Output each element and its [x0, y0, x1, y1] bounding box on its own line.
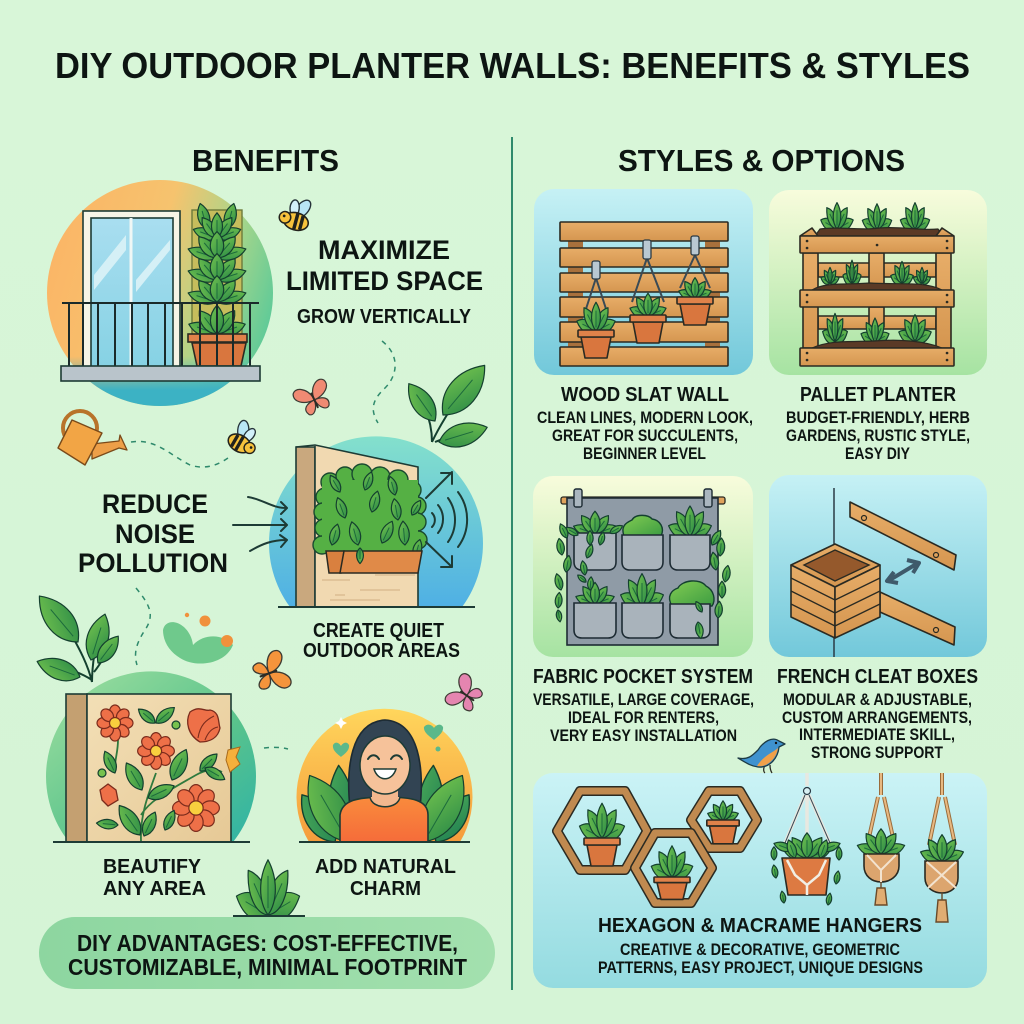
- panel: reduce noise pollution: [78, 436, 483, 662]
- icon: green plant tuft: [233, 860, 305, 926]
- icon: bee: [225, 416, 266, 459]
- callout: diy advantages: DIY ADVANTAGES: COST-EFFECTIVE,: [77, 930, 458, 956]
- caption: beautify any area: [103, 856, 206, 900]
- illustration: felt pockets with plants: [533, 476, 753, 657]
- caption: create quiet outdoor areas: [303, 620, 460, 662]
- title: DIY OUTDOOR PLANTER WALLS: BENEFITS & STYLES: [55, 45, 970, 86]
- panel: beautify any area: [46, 671, 256, 900]
- bushy plants and fans: [572, 506, 714, 613]
- icon: purple butterfly: [443, 672, 487, 717]
- icon: salmon butterfly: [291, 377, 336, 418]
- heading: reduce noise pollution: REDUCE: [102, 489, 208, 519]
- description: wood slat wall: [537, 408, 753, 463]
- panel: hexagon and macrame hangers: [533, 773, 987, 988]
- icon: smiling person among leaves: [292, 709, 479, 850]
- heading: fabric pocket system: FABRIC POCKET SYSTEM: [533, 666, 753, 688]
- panel: pallet planter: [769, 190, 987, 463]
- icon: leaf sprig: [401, 356, 496, 453]
- description: fabric pocket system: VERY EASY INSTALLATION: [550, 726, 737, 745]
- callout: diy advantages: [39, 917, 495, 989]
- caption: beautify any area: BEAUTIFY: [103, 856, 202, 878]
- heading: reduce noise pollution: POLLUTION: [78, 548, 228, 578]
- description: french cleat boxes: STRONG SUPPORT: [811, 743, 944, 762]
- panel: french cleat boxes: [769, 475, 987, 762]
- description: pallet planter: BUDGET-FRIENDLY, HERB: [786, 408, 970, 427]
- caption: add natural charm: [315, 856, 456, 900]
- panel: fabric pocket system: [533, 476, 754, 745]
- description: hexagon and macrame hangers: PATTERNS, EASY PROJECT, UNIQUE DESIGNS: [598, 958, 923, 977]
- caption: add natural charm: CHARM: [350, 878, 421, 900]
- description: french cleat boxes: CUSTOM ARRANGEMENTS,: [782, 708, 972, 727]
- icon: balcony with vertical planter: [47, 180, 273, 406]
- description: fabric pocket system: [533, 690, 754, 745]
- heading: reduce noise pollution: NOISE: [115, 519, 195, 549]
- description: french cleat boxes: MODULAR & ADJUSTABLE,: [783, 690, 972, 709]
- description: fabric pocket system: VERSATILE, LARGE COVERAGE,: [533, 690, 754, 709]
- description: pallet planter: GARDENS, RUSTIC STYLE,: [786, 426, 970, 445]
- illustration: macrame hangers: [771, 773, 965, 922]
- heading: reduce noise pollution: [78, 489, 228, 578]
- panel: wood slat wall: [534, 189, 753, 463]
- caption: beautify any area: ANY AREA: [103, 878, 206, 900]
- heading: maximize limited space: MAXIMIZE: [318, 235, 450, 265]
- icon: leaf sprig: [29, 588, 124, 686]
- heading: french cleat boxes: FRENCH CLEAT BOXES: [777, 666, 978, 688]
- caption: create quiet outdoor areas: OUTDOOR AREAS: [303, 640, 460, 662]
- description: pallet planter: [786, 408, 970, 463]
- description: hexagon and macrame hangers: CREATIVE & DECORATIVE, GEOMETRIC: [620, 940, 900, 959]
- caption: grow vertically: GROW VERTICALLY: [297, 306, 472, 328]
- heading: maximize limited space: [286, 235, 483, 296]
- trailing vines: [553, 522, 732, 639]
- illustration: pallet with herbs: [769, 190, 987, 375]
- icon: watering can: [58, 411, 127, 465]
- caption: create quiet outdoor areas: CREATE QUIET: [313, 620, 444, 642]
- illustration: wood slats with hanging pots: [534, 189, 753, 375]
- callout: diy advantages: CUSTOMIZABLE, MINIMAL FOOTPRINT: [68, 954, 467, 980]
- description: pallet planter: EASY DIY: [845, 444, 911, 463]
- icon: green wall blocking sound: [233, 436, 483, 607]
- description: fabric pocket system: IDEAL FOR RENTERS,: [568, 708, 719, 727]
- description: french cleat boxes: INTERMEDIATE SKILL,: [799, 725, 955, 744]
- description: wood slat wall: CLEAN LINES, MODERN LOOK,: [537, 408, 753, 427]
- decorative green blob with dots: [163, 613, 233, 664]
- illustration: hexagon shelves: [557, 791, 757, 903]
- description: wood slat wall: BEGINNER LEVEL: [583, 444, 706, 463]
- heading: styles and options: STYLES & OPTIONS: [618, 143, 905, 178]
- illustration: cleats and wooden box: [769, 475, 987, 657]
- icon: bluebird: [738, 739, 785, 773]
- icon: bee: [277, 192, 315, 233]
- heading: benefits: BENEFITS: [192, 143, 339, 178]
- icon: orange butterfly: [250, 649, 293, 696]
- panel: add natural charm: [292, 709, 479, 900]
- description: hexagon and macrame hangers: [598, 940, 923, 977]
- heading: wood slat wall: WOOD SLAT WALL: [561, 384, 729, 406]
- description: wood slat wall: GREAT FOR SUCCULENTS,: [552, 426, 738, 445]
- description: french cleat boxes: [782, 690, 972, 762]
- icon: flower mural wall: [46, 671, 256, 842]
- caption: add natural charm: ADD NATURAL: [315, 856, 456, 878]
- heading: hexagon and macrame hangers: HEXAGON & MACRAME HANGERS: [598, 915, 922, 937]
- panel: maximize limited space: [47, 180, 483, 406]
- heading: maximize limited space: LIMITED SPACE: [286, 266, 483, 296]
- heading: pallet planter: PALLET PLANTER: [800, 384, 956, 406]
